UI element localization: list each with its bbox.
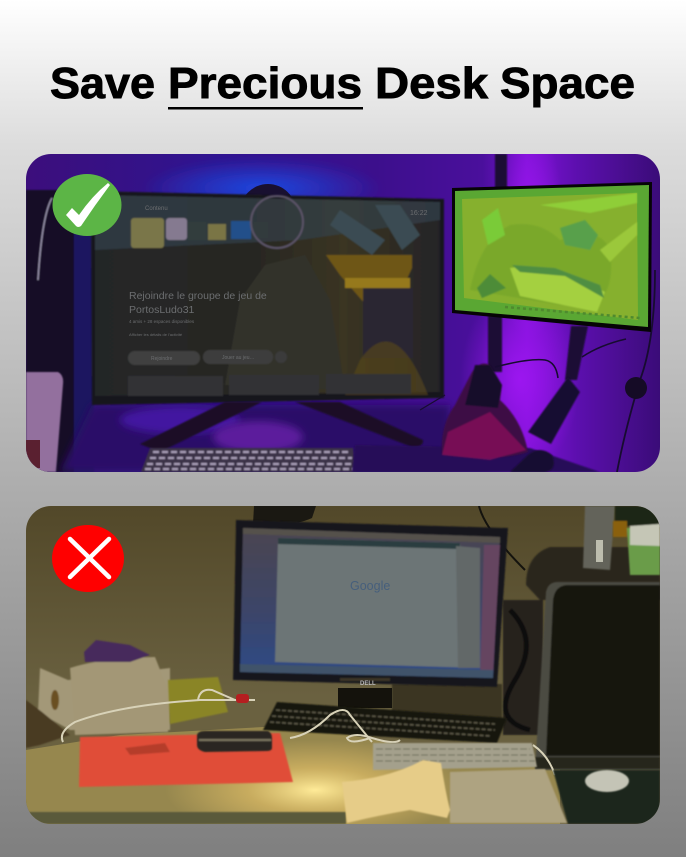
wallpaper fighters [470,193,637,312]
mouse [585,770,629,792]
on-screen text: 4 amis + 28 espaces disponibles [129,319,195,324]
on-screen text: Contenu [145,206,168,212]
black keyboard [263,702,507,743]
mousepad [553,770,660,824]
on-screen text: Rejoindre le groupe de jeu de [129,290,267,302]
pole and stand [488,154,588,380]
badge: check mark [52,174,122,236]
on-screen text: 16:22 [410,210,428,217]
speaker [535,582,660,770]
yellow carton [168,677,228,724]
game tiles [131,218,164,248]
title [50,59,635,110]
panel: good desk setup photo [26,154,660,472]
on-screen text: PortosLudo31 [129,304,195,316]
cup [26,372,63,472]
title: Desk [375,59,489,108]
power strip [528,377,580,444]
badge: cross mark [52,525,124,592]
white keyboard [373,743,537,770]
browser logo text: Google [350,579,390,593]
ring lamp behind the monitor [246,184,291,196]
shelf and cables behind [392,547,660,735]
title: Precious [168,59,362,108]
soldier artwork [226,266,342,384]
panel: cluttered desk photo [26,506,660,840]
main monitor [91,191,444,405]
browser window [274,543,460,668]
screen bottom cards [128,376,223,396]
mat at right of keyboard [352,445,600,472]
wallet [197,731,272,752]
on-screen text: Jouer au jeu… [222,355,255,361]
shopping bag and tissue box [26,640,170,748]
lamp head [253,506,316,522]
open book [342,760,567,823]
brand label: DELL [360,681,376,687]
white cable [62,690,555,775]
curtain on the left [26,190,94,472]
keyboard [141,448,356,472]
on-screen text [129,206,428,362]
figurine [442,364,554,472]
black cable [479,506,525,570]
title: Save [50,59,155,108]
cables [420,270,655,472]
on-screen text: Rejoindre [151,356,173,362]
on-screen text: Afficher les détails de l'activité [129,332,183,337]
monitor stand [140,402,423,452]
red folder [79,733,293,787]
on-screen header strip [95,195,440,250]
desk surface [26,725,560,824]
desk surface [60,405,450,472]
medicine boxes [613,506,660,575]
monitor stand [338,688,392,708]
title: Space [500,59,635,108]
bottle [583,506,615,570]
secondary monitor highlighted in green [452,182,652,332]
monitor [233,520,508,687]
